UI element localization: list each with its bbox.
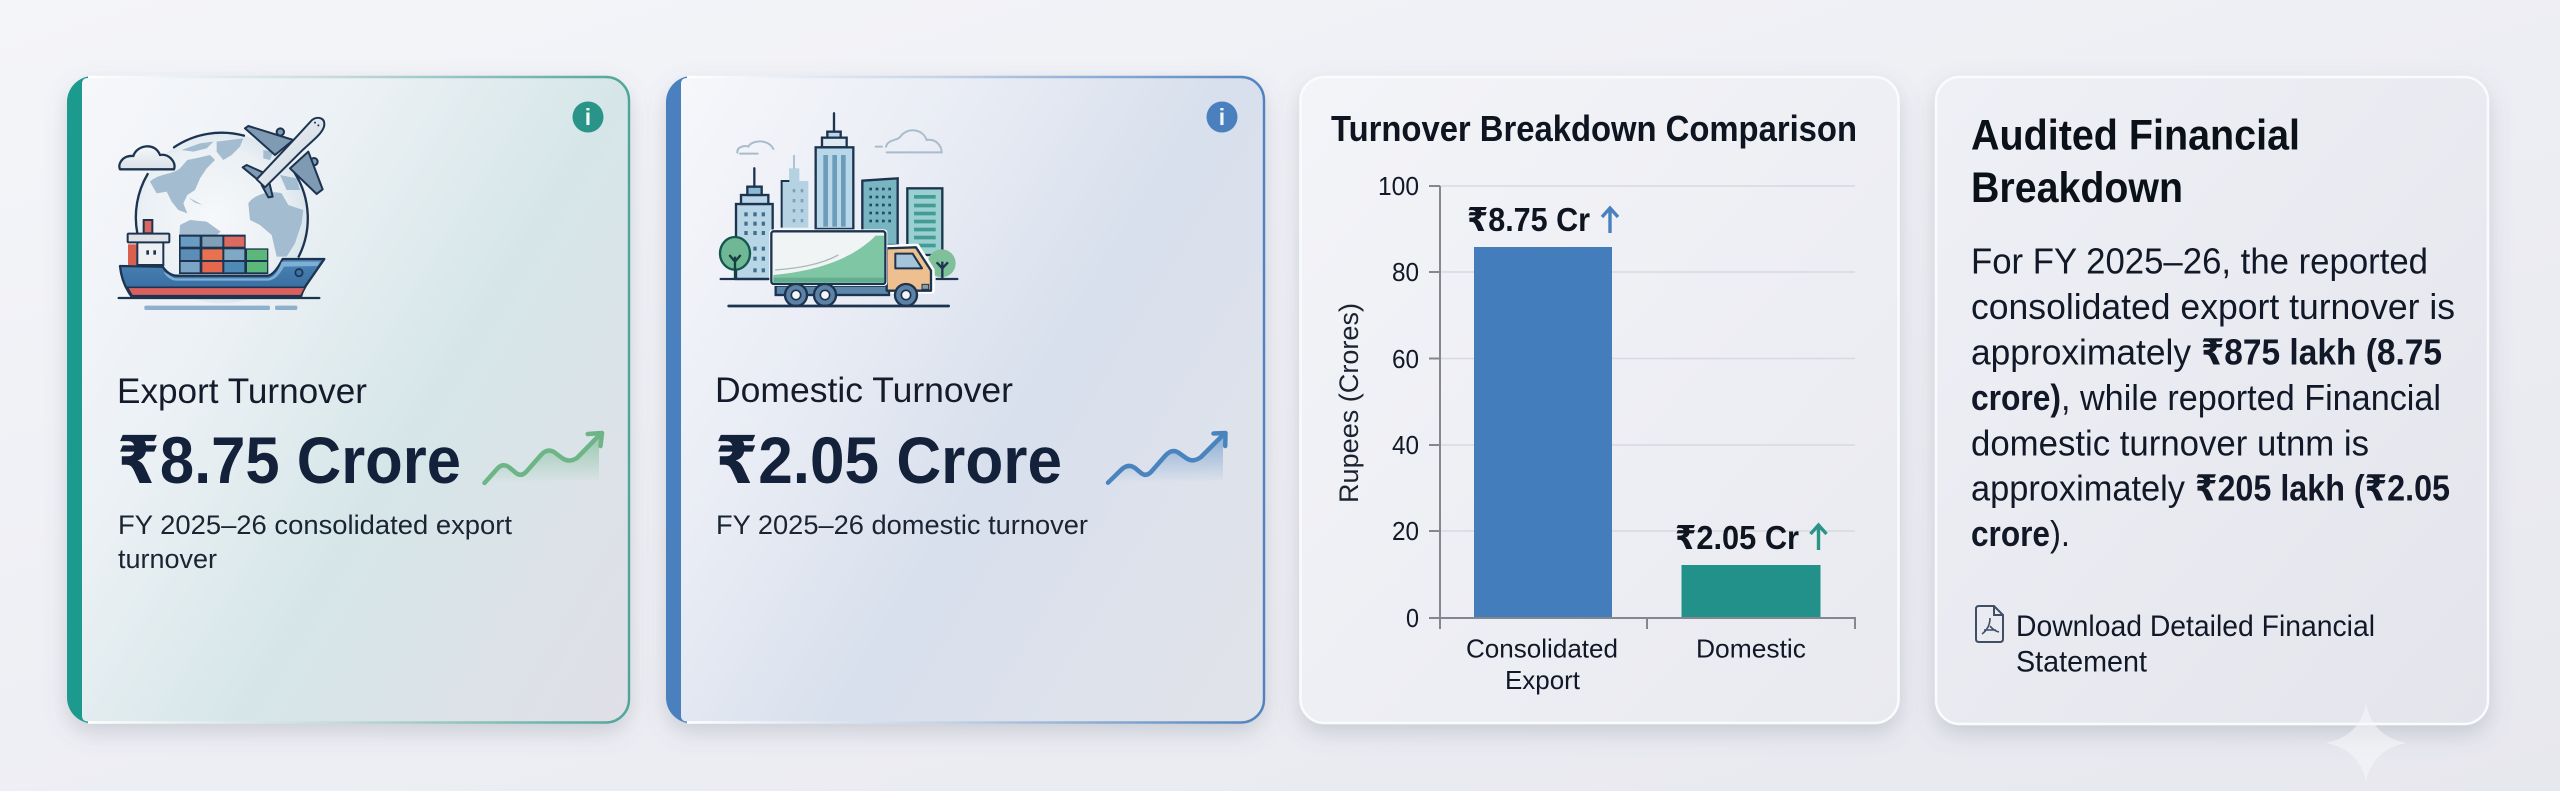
label: domestic turnover: Domestic Turnover (715, 371, 1013, 410)
text: audit summary paragraph: approximately (1971, 468, 2185, 508)
value: domestic amount: ₹2.05 Crore (715, 423, 1062, 497)
icon: info badge (1206, 102, 1238, 132)
label: export turnover: Export Turnover (117, 372, 367, 411)
y axis tick labels: 80 (1392, 257, 1419, 287)
panel: domestic turnover card (666, 76, 1265, 724)
text: audit summary paragraph: domestic turnover utnm is (1971, 422, 2369, 464)
panel: export turnover card (67, 76, 630, 724)
text: audit summary paragraph: crore) (1971, 377, 2061, 418)
text: export description: FY 2025–26 consolidated export (118, 510, 512, 540)
bar: consolidated export (1474, 247, 1612, 618)
link: download statement (2016, 610, 2375, 678)
icon: globe, ship and plane (119, 118, 324, 310)
text: audit summary paragraph: For FY 2025–26, the reported (1971, 240, 2428, 282)
link: download statement: Download Detailed Financial (2016, 610, 2375, 643)
x axis labels (1466, 634, 1806, 695)
heading: audited financial breakdown: Breakdown (1971, 164, 2183, 212)
y axis tick labels: 100 (1378, 171, 1419, 201)
value label: consolidated export: ₹8.75 Cr (1467, 201, 1590, 238)
x axis labels: Consolidated (1466, 634, 1618, 664)
y axis tick labels: 40 (1392, 430, 1419, 460)
text: audit summary paragraph: ₹875 lakh (8.75 (2201, 332, 2442, 372)
y axis tick labels: 0 (1406, 603, 1419, 633)
panel: audited financial breakdown card (1936, 77, 2488, 724)
value: export amount: ₹8.75 Crore (117, 423, 461, 497)
heading: audited financial breakdown (1971, 112, 2300, 212)
chart: export sparkline (484, 433, 602, 483)
icon: city skyline and delivery truck (720, 113, 957, 306)
bar chart (1334, 171, 1855, 695)
text: export description (118, 510, 512, 574)
text: audit summary paragraph (1971, 240, 2455, 554)
text: audit summary paragraph: , while reported Financial (2061, 377, 2441, 418)
icon: info badge (572, 102, 604, 132)
y axis tick labels: 60 (1392, 344, 1419, 374)
text: audit summary paragraph: crore (1971, 513, 2050, 554)
link: download statement: Statement (2016, 646, 2148, 678)
chart: domestic sparkline (1108, 433, 1226, 483)
text: audit summary paragraph: ). (2050, 513, 2070, 554)
icon: info badge: i (1219, 104, 1225, 130)
text: audit summary paragraph: consolidated export turnover is (1971, 286, 2455, 327)
value label: domestic: ₹2.05 Cr (1675, 519, 1799, 556)
text: audit summary paragraph: ₹205 lakh (₹2.05 (2195, 468, 2450, 508)
x axis labels: Domestic (1696, 634, 1806, 664)
heading: audited financial breakdown: Audited Financial (1971, 112, 2300, 160)
text: audit summary paragraph: approximately (1971, 332, 2191, 372)
y axis title: Rupees (Crores) (1334, 303, 1364, 503)
text: export description: turnover (118, 544, 217, 574)
heading: chart title: Turnover Breakdown Comparison (1331, 108, 1857, 149)
bar: domestic (1682, 565, 1820, 618)
y axis tick labels: 20 (1392, 516, 1419, 546)
icon: pdf document (1976, 606, 2003, 642)
panel: turnover breakdown chart card (1300, 77, 1898, 723)
icon: info badge: i (585, 104, 591, 130)
text: domestic description: FY 2025–26 domestic turnover (716, 510, 1088, 540)
decorative sparkle (2326, 703, 2406, 782)
y axis tick labels (1378, 171, 1419, 633)
x axis labels: Export (1505, 665, 1581, 695)
